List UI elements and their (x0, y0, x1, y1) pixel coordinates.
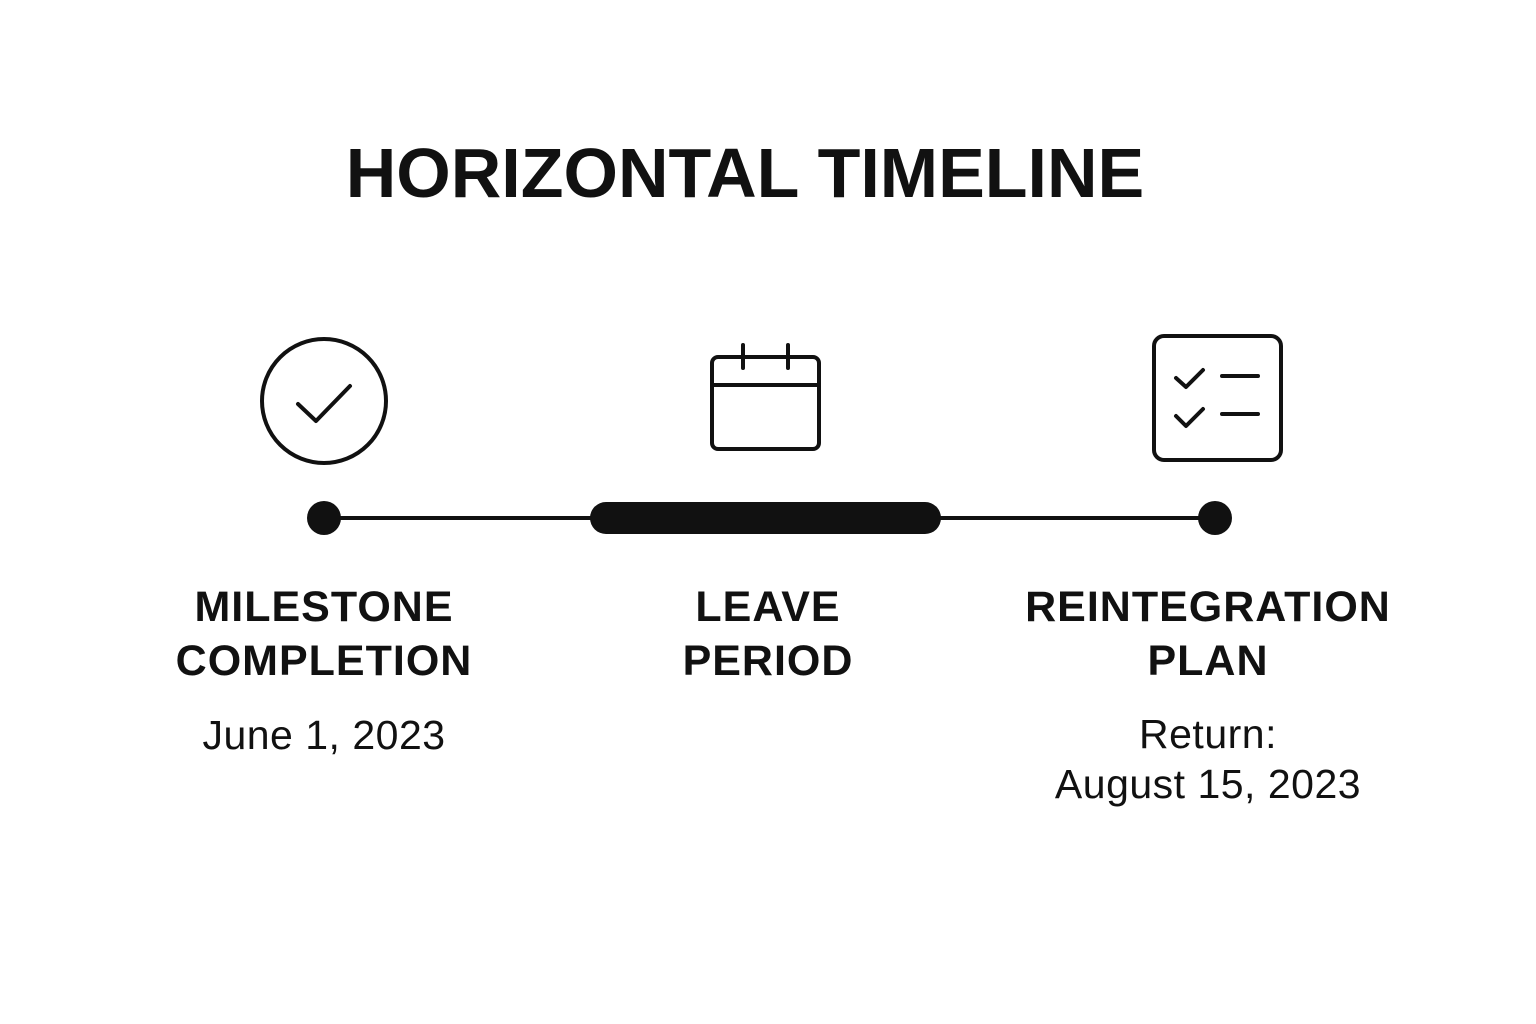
label: leave period: LEAVE (695, 583, 841, 631)
label: reintegration plan (1025, 583, 1391, 685)
date: return: August 15, 2023 (1055, 761, 1361, 807)
timeline line (307, 501, 1232, 535)
icon: calendar (712, 345, 819, 449)
label: milestone completion (176, 583, 472, 685)
date: return: Return: (1139, 711, 1277, 757)
title: HORIZONTAL TIMELINE (346, 134, 1144, 212)
label: reintegration plan: REINTEGRATION (1025, 583, 1391, 631)
label: reintegration plan: PLAN (1147, 637, 1269, 685)
label: milestone completion: MILESTONE (194, 583, 454, 631)
date: June 1, 2023: June 1, 2023 (202, 712, 446, 758)
label: leave period (683, 583, 853, 685)
icon: checklist (1154, 336, 1281, 460)
icon: check circle (262, 339, 386, 463)
label: leave period: PERIOD (683, 637, 853, 685)
date: return (1055, 711, 1361, 807)
label: milestone completion: COMPLETION (176, 637, 472, 685)
